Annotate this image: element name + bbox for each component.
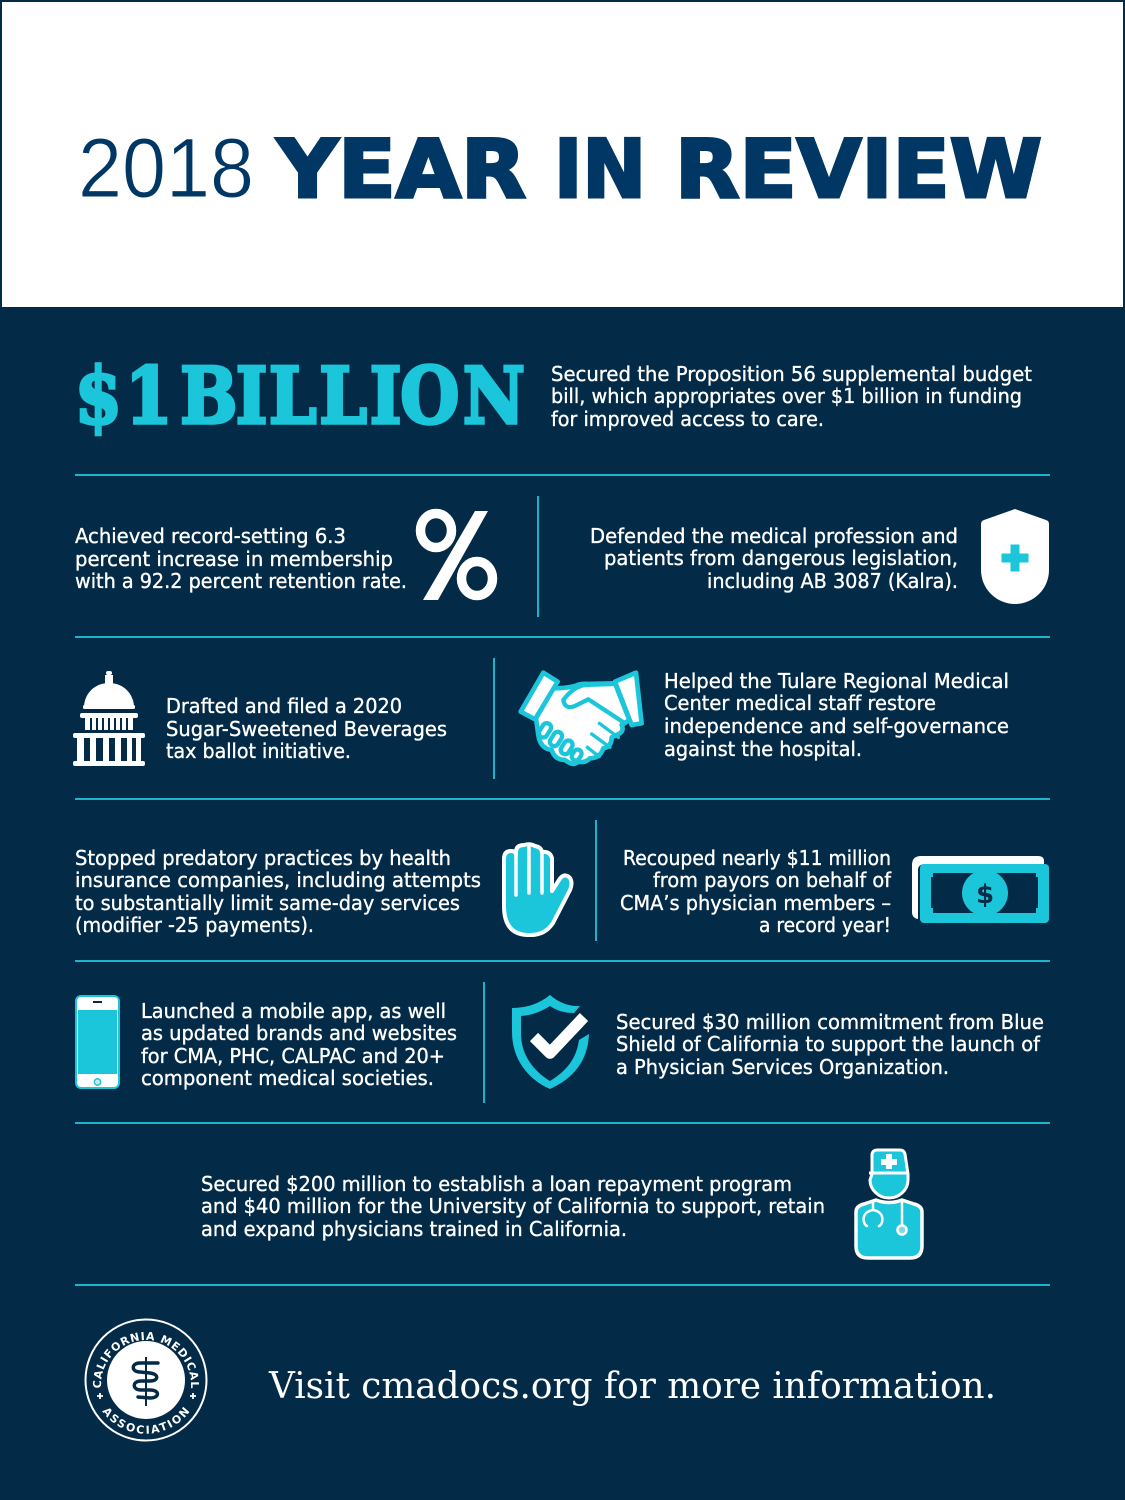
icon: banknote: $: [976, 880, 994, 910]
text: membership: percent increase in membership: [75, 547, 393, 571]
text: recouped $11 million: a record year!: [759, 913, 891, 937]
text: Tulare Regional: against the hospital.: [664, 737, 862, 761]
text: sugar-sweetened beverages: Sugar-Sweetened Beverages: [166, 717, 447, 741]
title: 2018: [78, 121, 254, 215]
text: Tulare Regional: [664, 669, 1009, 761]
logo: California Medical Association seal: ASSOCIATION: [102, 1406, 190, 1434]
text: predatory practices: to substantially limit same-day services: [75, 891, 460, 915]
text: Tulare Regional: independence and self-governance: [664, 714, 1009, 738]
text: mobile app: component medical societies.: [141, 1066, 434, 1090]
text: mobile app: as updated brands and websites: [141, 1021, 457, 1045]
text: defended profession: including AB 3087 (Kalra).: [707, 569, 958, 593]
title: REVIEW: [675, 123, 1042, 216]
logo: California Medical Association seal: CALIFORNIA MEDICAL: [92, 1332, 200, 1388]
text: Proposition 56: bill, which appropriates over $1 billion in funding: [551, 384, 1022, 408]
text: Blue Shield: a Physician Services Organization.: [616, 1055, 949, 1079]
text: Proposition 56: [551, 362, 1032, 431]
divider lines: [75, 475, 1050, 1285]
text: predatory practices: [75, 846, 481, 937]
icon: doctor: [856, 1150, 922, 1258]
text: sugar-sweetened beverages: Drafted and filed a 2020: [166, 694, 402, 718]
text: mobile app: Launched a mobile app, as well: [141, 999, 446, 1023]
text: predatory practices: insurance companies, including attempts: [75, 868, 481, 892]
text: sugar-sweetened beverages: tax ballot initiative.: [166, 739, 351, 763]
icon: percent sign: [420, 511, 492, 600]
text: sugar-sweetened beverages: [166, 694, 447, 763]
text: recouped $11 million: [620, 846, 892, 937]
text: mobile app: for CMA, PHC, CALPAC and 20+: [141, 1044, 445, 1068]
text: mobile app: [141, 999, 457, 1090]
text: loan repayment: and $40 million for the University of California to support, retain: [201, 1194, 825, 1218]
text: recouped $11 million: from payors on behalf of: [653, 868, 892, 892]
header band: [2, 2, 1123, 307]
text: defended profession: [590, 524, 958, 593]
text: Blue Shield: Shield of California to support the launch of: [616, 1032, 1041, 1056]
text: defended profession: Defended the medical profession and: [590, 524, 958, 548]
title: [78, 121, 1042, 216]
text: recouped $11 million: CMA’s physician members –: [620, 891, 891, 915]
icon: capitol building: [73, 671, 145, 766]
text: Tulare Regional: Helped the Tulare Regional Medical: [664, 669, 1009, 693]
text: Blue Shield: Secured $30 million commitment from Blue: [616, 1010, 1044, 1034]
text: predatory practices: Stopped predatory practices by health: [75, 846, 451, 870]
title: IN: [554, 123, 646, 216]
title: YEAR: [276, 123, 526, 216]
headline figure: $1 billion: $1 BILLION: [75, 350, 525, 442]
icon: banknote: [912, 856, 1049, 923]
text: membership: Achieved record-setting 6.3: [75, 524, 346, 548]
text: recouped $11 million: Recouped nearly $11 million: [623, 846, 891, 870]
logo: California Medical Association seal: [84, 1318, 208, 1442]
text: loan repayment: Secured $200 million to establish a loan repayment program: [201, 1172, 792, 1196]
icon: smartphone: [76, 996, 119, 1088]
icon: shield with checkmark: [512, 995, 589, 1089]
text: loan repayment: [201, 1172, 825, 1241]
text: Proposition 56: for improved access to care.: [551, 407, 824, 431]
text: defended profession: patients from dangerous legislation,: [604, 546, 958, 570]
icon: shield with cross: [981, 509, 1049, 604]
icon: raised hand: [504, 844, 572, 935]
text: Proposition 56: Secured the Proposition 56 supplemental budget: [551, 362, 1032, 386]
text: Blue Shield: [616, 1010, 1044, 1079]
text: membership: [75, 524, 407, 593]
text: membership: with a 92.2 percent retention rate.: [75, 569, 407, 593]
text: loan repayment: and expand physicians trained in California.: [201, 1217, 627, 1241]
text: predatory practices: (modifier -25 payments).: [75, 913, 314, 937]
icon: handshake: [521, 673, 642, 764]
text: Tulare Regional: Center medical staff restore: [664, 691, 936, 715]
call to action: Visit cmadocs.org for more information.: [268, 1366, 996, 1407]
